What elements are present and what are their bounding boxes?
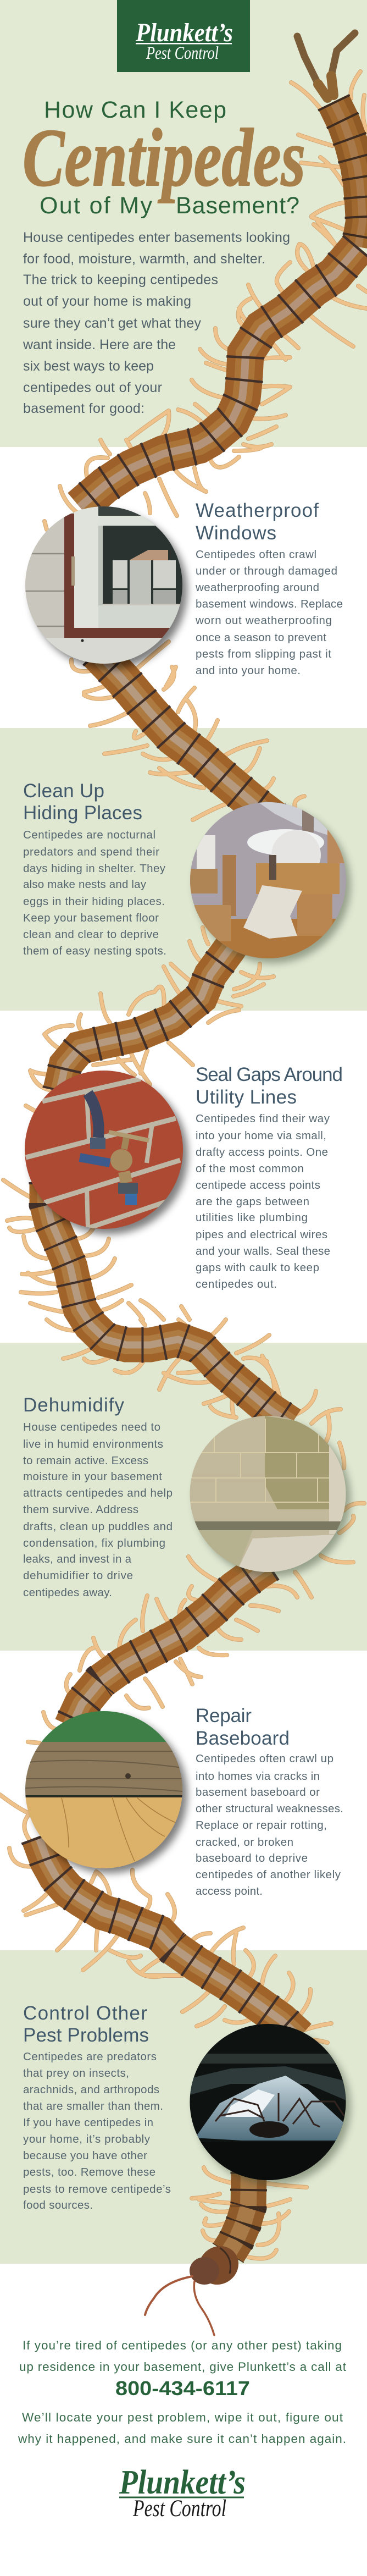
body text: Centipedes often crawl: [196, 548, 316, 561]
body text: other structural weaknesses.: [196, 1802, 343, 1815]
call to action text: [18, 2338, 347, 2446]
intro text: want inside. Here are the: [23, 337, 176, 352]
body text: utilities like plumbing: [196, 1211, 308, 1224]
body text: pests from slipping past it: [196, 648, 331, 660]
body text: of the most common: [196, 1162, 304, 1175]
section: repair baseboard: [25, 1705, 343, 1897]
body text: that prey on insects,: [23, 2067, 129, 2079]
body text: attracts centipedes and help: [23, 1487, 173, 1499]
body text: your home, it’s probably: [23, 2133, 151, 2145]
heading: Dehumidify: [23, 1394, 124, 1416]
intro text: sure they can’t get what they: [23, 316, 201, 331]
body text: [196, 1752, 343, 1897]
phone number: 800-434-6117: [115, 2377, 250, 2400]
logo: Plunkett's Pest Control (bottom): Pest Control: [132, 2496, 226, 2522]
intro text: basement for good:: [23, 401, 144, 416]
panel background: dehumidify: [0, 1343, 367, 1651]
centipede body: section between utility lines and dehumidify: [47, 1182, 291, 1424]
logo: Plunkett's Pest Control (bottom): [119, 2464, 246, 2522]
body text: pests, too. Remove these: [23, 2166, 155, 2178]
body text: days hiding in shelter. They: [23, 862, 166, 875]
call to action text: If you’re tired of centipedes (or any other pest) taking: [23, 2338, 342, 2352]
heading: Control Other: [23, 2003, 147, 2024]
title: Out of My: [40, 192, 153, 219]
body text: that are smaller than them.: [23, 2100, 163, 2112]
centipede body: tail section: [333, 102, 363, 247]
body text: live in humid environments: [23, 1438, 163, 1450]
body text: centipede access points: [196, 1179, 320, 1192]
body text: worn out weatherproofing: [195, 614, 332, 627]
body text: [23, 2050, 171, 2211]
centipede terminal legs: [297, 33, 355, 98]
body text: leaks, and invest in a: [23, 1553, 132, 1565]
panel background: intro: [0, 0, 367, 447]
body text: cracked, or broken: [196, 1836, 293, 1849]
body text: Replace or repair rotting,: [196, 1819, 327, 1832]
body text: baseboard to deprive: [196, 1852, 308, 1865]
body text: to remain active. Excess: [23, 1454, 148, 1467]
body text: [23, 829, 166, 957]
body text: If you have centipedes in: [23, 2116, 153, 2129]
centipede body: section between baseboard and pests: [38, 1836, 299, 2037]
title: Basement?: [176, 192, 299, 219]
title: [23, 97, 305, 219]
body text: eggs in their hiding places.: [23, 895, 165, 908]
body text: access point.: [196, 1885, 263, 1897]
centipede body: section behind window photo: [80, 247, 358, 507]
logo: Plunkett's Pest Control (top): [117, 0, 250, 72]
heading: [23, 780, 142, 824]
logo: Plunkett's Pest Control (top): Pest Control: [146, 43, 219, 63]
centipede body: front section: [228, 2172, 249, 2253]
body text: pipes and electrical wires: [196, 1228, 327, 1241]
body text: because you have other: [23, 2149, 147, 2162]
body text: basement baseboard or: [196, 1786, 320, 1799]
body text: Centipedes find their way: [196, 1112, 330, 1125]
intro text: six best ways to keep: [23, 358, 154, 374]
heading: [196, 1705, 290, 1749]
heading: Utility Lines: [196, 1086, 297, 1108]
section: weatherproof windows: [25, 500, 343, 677]
heading: [23, 2003, 149, 2046]
heading: Baseboard: [196, 1728, 290, 1749]
body text: under or through damaged: [196, 565, 337, 577]
body text: Keep your basement floor: [23, 912, 159, 924]
centipede head and antennae: [145, 2238, 246, 2335]
photo: faucet in brick wall: [25, 1071, 188, 1234]
body text: centipedes away.: [23, 1586, 112, 1599]
body text: Centipedes are predators: [23, 2050, 157, 2063]
heading: Repair: [196, 1705, 252, 1726]
body text: them survive. Address: [23, 1503, 138, 1516]
body text: gaps with caulk to keep: [196, 1261, 319, 1274]
body text: into homes via cracks in: [196, 1770, 320, 1783]
section: clean up hiding places: [23, 780, 351, 963]
body text: drafts, clean up puddles and: [23, 1520, 173, 1533]
intro text: out of your home is making: [23, 294, 191, 309]
body text: into your home via small,: [196, 1129, 326, 1142]
photo: window: [25, 506, 187, 669]
photo: wood baseboard: [25, 1710, 187, 1873]
logo: Plunkett's Pest Control (bottom): Plunkett’s: [119, 2464, 246, 2501]
body text: pests to remove centipede’s: [23, 2183, 171, 2196]
body text: once a season to prevent: [196, 631, 326, 644]
heading: Seal Gaps Around: [196, 1064, 343, 1085]
call to action text: why it happened, and make sure it can’t happen again.: [18, 2432, 346, 2446]
section: seal gaps around utility lines: [25, 1064, 343, 1290]
body text: condensation, fix plumbing: [23, 1537, 165, 1549]
photo: damp basement wall: [190, 1416, 351, 1577]
body text: moisture in your basement: [23, 1470, 162, 1483]
intro text: The trick to keeping centipedes: [23, 272, 218, 288]
body text: and into your home.: [196, 664, 301, 677]
section: control other pest problems: [23, 2003, 351, 2211]
heading: Windows: [196, 522, 276, 544]
heading: Hiding Places: [23, 802, 142, 824]
panel background: clean up hiding places: [0, 728, 367, 1011]
call to action text: We’ll locate your pest problem, wipe it out, figure out: [22, 2410, 343, 2424]
body text: food sources.: [23, 2199, 93, 2211]
body text: [196, 1112, 330, 1290]
body text: centipedes out.: [196, 1278, 277, 1290]
centipede body: section between windows and hiding places: [96, 652, 275, 819]
intro text: [23, 230, 290, 416]
body text: drafty access points. One: [196, 1146, 328, 1159]
body text: centipedes of another likely: [196, 1868, 341, 1881]
body text: also make nests and lay: [23, 878, 147, 891]
body text: them of easy nesting spots.: [23, 945, 166, 957]
body text: dehumidifier to drive: [23, 1569, 133, 1582]
heading: [196, 500, 319, 544]
body text: and your walls. Seal these: [196, 1245, 330, 1257]
centipede body: section between hiding places and utility lines: [59, 943, 233, 1091]
body text: Centipedes are nocturnal: [23, 829, 155, 841]
intro text: for food, moisture, warmth, and shelter.: [23, 251, 265, 267]
title: How Can I Keep: [44, 97, 226, 123]
heading: Clean Up: [23, 780, 104, 802]
body text: House centipedes need to: [23, 1421, 160, 1433]
body text: Centipedes often crawl up: [196, 1752, 333, 1765]
body text: basement windows. Replace: [196, 598, 343, 610]
body text: arachnids, and arthropods: [23, 2083, 159, 2096]
heading: Pest Problems: [23, 2025, 149, 2046]
body text: [195, 548, 343, 677]
heading: [196, 1064, 343, 1108]
body text: clean and clear to deprive: [23, 928, 159, 941]
body text: [23, 1421, 173, 1599]
intro text: centipedes out of your: [23, 380, 162, 395]
intro text: House centipedes enter basements looking: [23, 230, 290, 245]
body text: weatherproofing around: [195, 581, 319, 594]
body text: are the gaps between: [196, 1195, 309, 1208]
photo: spider: [190, 2023, 351, 2185]
body text: predators and spend their: [23, 846, 159, 858]
centipede body: section between dehumidify and baseboard: [71, 1564, 269, 1726]
photo: boxes: [190, 802, 351, 963]
section: dehumidify: [23, 1394, 351, 1599]
panel background: control other pest problems: [0, 1950, 367, 2264]
call to action text: up residence in your basement, give Plunkett’s a call at: [19, 2360, 347, 2374]
heading: Weatherproof: [196, 500, 319, 521]
logo: Plunkett's Pest Control (top): Plunkett’s: [135, 18, 233, 47]
